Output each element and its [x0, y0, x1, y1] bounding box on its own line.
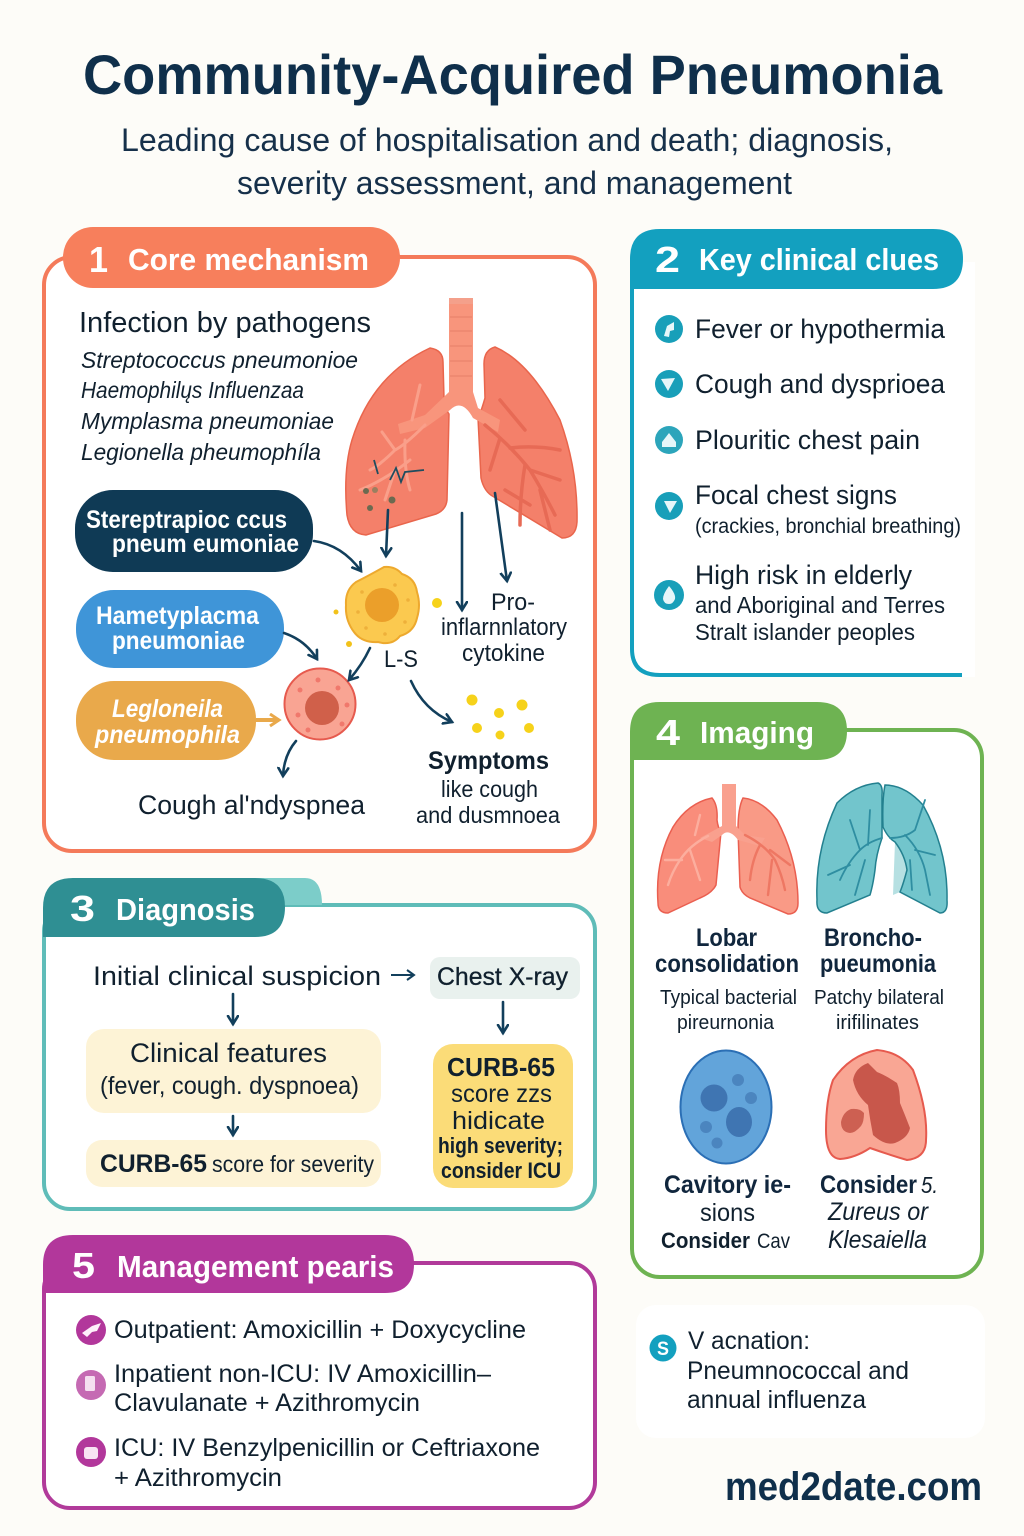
panel: 4 imaging	[630, 702, 982, 1277]
box: curb-65 severity: CURB-65	[100, 1150, 207, 1178]
clue: fever: Fever or hypothermia	[695, 314, 946, 344]
icon: vaccination badge: S	[657, 1339, 669, 1360]
label: bronchopneumonia: irifilinates	[836, 1012, 919, 1034]
text: pro-inflammatory cytokine: cytokine	[462, 640, 545, 667]
icon: cavitary lesions	[680, 1050, 772, 1164]
heading: key clinical clues: 2	[655, 239, 680, 280]
item: icu	[76, 1434, 540, 1492]
text: symptoms: like cough	[441, 776, 538, 802]
text: initial clinical suspicion: Initial clinical suspicion	[93, 961, 381, 991]
label: cavitary lesions: Consider	[661, 1228, 750, 1253]
pill: legionella: pneumophila	[94, 721, 240, 749]
text: symptoms: and dusmnoea	[416, 802, 560, 828]
clue: high risk: and Aboriginal and Terres	[695, 592, 945, 618]
box: curb-65 high severity: hidicate	[452, 1107, 545, 1135]
label: lobar consolidation	[655, 924, 799, 1034]
heading: key clinical clues: Key clinical clues	[699, 242, 939, 277]
icon: consolidation patch	[826, 1050, 926, 1160]
item: icu: ICU: IV Benzylpenicillin or Ceftriaxone	[114, 1434, 540, 1462]
text: vaccination	[687, 1327, 909, 1414]
title: Community-Acquired Pneumonia	[83, 43, 943, 106]
item: outpatient: Outpatient: Amoxicillin + Doxycycline	[114, 1316, 526, 1344]
heading: management pearls	[43, 1235, 414, 1293]
box: curb-65 high severity: score zzs	[451, 1080, 552, 1108]
panel: 2 key clinical clues	[630, 229, 975, 677]
clue: high risk: Stralt islander peoples	[695, 619, 915, 645]
arrow: chest x-ray to curb-65	[502, 1002, 504, 1033]
label: bronchopneumonia: Broncho-	[824, 924, 922, 952]
pill: mycoplasma	[76, 590, 284, 668]
text: symptoms	[416, 747, 560, 828]
text: pro-inflammatory cytokine: inflarnnlatory	[441, 614, 567, 641]
label: cavitary lesions: sions	[700, 1199, 755, 1227]
pill: mycoplasma: pneumoniae	[112, 627, 245, 655]
heading: imaging	[630, 702, 847, 760]
item: icu: + Azithromycin	[114, 1464, 282, 1492]
label: consider s. aureus or klebsiella: Klesaiella	[828, 1226, 927, 1254]
label: consider s. aureus or klebsiella: Consider	[820, 1171, 917, 1199]
label: cavitary lesions	[661, 1171, 791, 1253]
text: pathogens list: Legionella pheumophíla	[81, 439, 321, 465]
clue: high risk: High risk in elderly	[695, 560, 912, 590]
clue: focal chest signs: Focal chest signs	[695, 480, 897, 510]
text: pro-inflammatory cytokine	[441, 589, 567, 667]
clue: focal chest signs: (crackies, bronchial breathing)	[695, 515, 961, 538]
pill: mycoplasma: Hametyplacma	[96, 602, 260, 630]
pill: streptococcus	[75, 490, 313, 572]
label: consider s. aureus or klebsiella: Zureus or	[827, 1198, 930, 1226]
heading: imaging: Imaging	[700, 715, 814, 750]
label: bronchopneumonia: pueumonia	[820, 950, 937, 978]
brand: med2date.com: med2date.com	[725, 1465, 982, 1509]
text: pathogens list: Infection by pathogens	[79, 307, 371, 339]
heading: diagnosis	[43, 878, 322, 937]
panel: 1 core mechanism	[44, 227, 595, 851]
text: cough and dyspnea: Cough al'ndyspnea	[138, 790, 366, 820]
heading: diagnosis: Diagnosis	[116, 892, 255, 927]
subtitle: Leading cause of hospitalisation and death; diagnosis,	[121, 122, 893, 158]
clue: high risk	[654, 560, 945, 645]
box: curb-65 high severity: high severity;	[438, 1133, 563, 1158]
icon: vaccination badge	[650, 1334, 676, 1362]
box: clinical features: Clinical features	[130, 1038, 327, 1068]
label: cavitary lesions: Cavitory ie-	[664, 1171, 791, 1199]
text: vaccination: annual influenza	[687, 1386, 866, 1414]
box: curb-65 high severity	[433, 1044, 573, 1188]
panel: 5 management pearls	[43, 1235, 595, 1508]
clue: focal chest signs	[655, 480, 961, 538]
icon: cytokine dots	[466, 694, 534, 740]
label: lobar consolidation: consolidation	[655, 950, 799, 978]
clue: cough: Cough and dysprioea	[695, 369, 946, 399]
label: cavitary lesions: Cav	[757, 1230, 790, 1253]
label: bronchopneumonia: Patchy bilateral	[814, 987, 944, 1009]
box: curb-65 severity: score for severity	[212, 1151, 374, 1177]
text: pathogens list	[79, 307, 371, 465]
heading: core mechanism	[63, 227, 400, 288]
subtitle: severity assessment, and management	[237, 165, 792, 201]
heading: core mechanism: 1	[89, 239, 108, 280]
item: inpatient non-icu	[76, 1360, 491, 1417]
arrow: to clinical features	[232, 994, 234, 1024]
box: curb-65 high severity: consider ICU	[441, 1158, 561, 1183]
box: chest x-ray	[430, 957, 580, 999]
label: bronchopneumonia	[814, 924, 944, 1034]
panel: 3 diagnosis	[43, 878, 595, 1209]
icon: red lungs	[658, 784, 798, 914]
text: pathogens list: Mymplasma pneumoniae	[81, 408, 334, 434]
box: chest x-ray: Chest X-ray	[437, 963, 568, 991]
pill: legionella: Legloneila	[112, 695, 223, 723]
box: clinical features	[86, 1029, 381, 1113]
icon: red cell	[284, 668, 356, 740]
arrows: mechanism flow	[256, 493, 507, 776]
icon: teal lungs	[817, 783, 947, 913]
box: curb-65 severity	[86, 1140, 381, 1187]
pill: legionella	[76, 681, 256, 760]
text: vaccination: Pneumnococcal and	[687, 1357, 909, 1385]
text: vaccination: V acnation:	[688, 1327, 810, 1355]
text: pathogens list: Haemophilųs Influenzaa	[81, 377, 304, 403]
label: lobar consolidation: pireurnonia	[677, 1012, 775, 1034]
icon: yellow cell	[334, 567, 442, 647]
text: pathogens list: Streptococcus pneumonioe	[81, 347, 358, 373]
box: clinical features: (fever, cough. dyspnoea)	[100, 1072, 359, 1100]
heading: diagnosis: 3	[70, 888, 95, 929]
arrow: to curb-65	[232, 1116, 234, 1135]
pill: streptococcus: Stereptrapioc ccus	[86, 506, 287, 534]
label: L-S: L-S	[384, 646, 418, 673]
label: lobar consolidation: Typical bacterial	[660, 987, 797, 1009]
arrow: to chest x-ray	[391, 970, 414, 980]
label: lobar consolidation: Lobar	[696, 924, 757, 952]
item: inpatient non-icu: Inpatient non-ICU: IV Amoxicillin–	[114, 1360, 491, 1388]
heading: management pearls: Management pearis	[117, 1249, 394, 1284]
text: symptoms: Symptoms	[428, 747, 549, 775]
pill: streptococcus: pneum eumoniae	[112, 530, 299, 558]
item: inpatient non-icu: Clavulanate + Azithromycin	[114, 1389, 420, 1417]
text: pro-inflammatory cytokine: Pro-	[491, 589, 535, 616]
heading: core mechanism: Core mechanism	[128, 242, 369, 277]
label: consider s. aureus or klebsiella	[820, 1171, 938, 1254]
heading: imaging: 4	[656, 712, 680, 753]
clue: pleuritic pain: Plouritic chest pain	[695, 425, 920, 455]
heading: key clinical clues	[630, 229, 963, 289]
box: curb-65 high severity: CURB-65	[447, 1052, 555, 1082]
subtitle	[121, 122, 893, 201]
heading: management pearls: 5	[72, 1245, 95, 1286]
icon: lungs	[346, 298, 577, 538]
label: consider s. aureus or klebsiella: 5.	[921, 1172, 938, 1198]
panel: vaccination	[636, 1305, 985, 1438]
